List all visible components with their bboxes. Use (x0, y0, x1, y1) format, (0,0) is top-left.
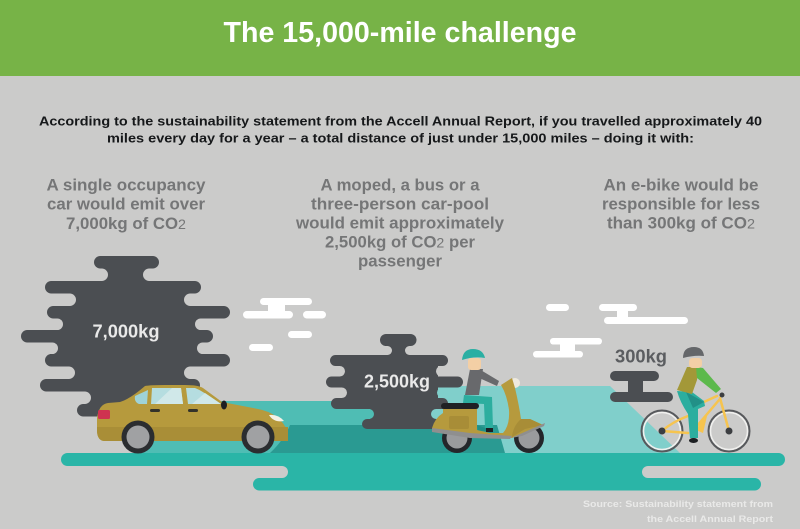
rider torso (677, 367, 698, 394)
column text: moped, bus or car-pool: would emit approximately (295, 214, 505, 232)
intro text: According to the sustainability statement from the Accell Annual Report, if you travelled approximately 40 (39, 114, 762, 128)
column text: moped, bus or car-pool: three-person car-pool (311, 196, 489, 214)
source note (583, 499, 774, 525)
emission cloud: 7,000kg (15, 256, 237, 416)
icon: car (97, 385, 288, 454)
label: 7,000kg: 7,000kg (92, 322, 160, 342)
column text: e-bike: An e-bike would be (604, 176, 758, 194)
column text: single occupancy car: 7,000kg of CO2 (66, 215, 186, 233)
label: 2,500kg: 2,500kg (364, 372, 430, 392)
road and teal trail (61, 386, 792, 490)
emission cloud: 300kg (610, 346, 673, 402)
column text: e-bike: than 300kg of CO 2 (607, 214, 755, 232)
source note: Source: Sustainability statement from (583, 499, 773, 510)
column text: moped, bus or car-pool: A moped, a bus or a (320, 176, 480, 194)
intro text: miles every day for a year – a total distance of just under 15,000 miles – doing it with: (107, 130, 694, 146)
icon: scooter and rider (432, 349, 545, 453)
column text: moped, bus or car-pool: passenger (358, 252, 443, 270)
rider arm (696, 367, 721, 393)
column text: single occupancy car: car would emit over (47, 196, 206, 214)
rider helmet (462, 349, 485, 360)
source note: the Accell Annual Report (647, 514, 774, 525)
column text: single occupancy car: A single occupancy (46, 176, 206, 194)
white clouds, right group (533, 304, 688, 358)
rider legs (463, 395, 493, 428)
white clouds, left group (243, 298, 326, 351)
rider torso and arm (465, 369, 483, 395)
rider legs (677, 391, 705, 438)
title: The 15,000-mile challenge (224, 17, 576, 49)
column text: e-bike (602, 176, 760, 232)
rider helmet (683, 347, 704, 358)
column text: single occupancy car (46, 176, 206, 233)
column text: e-bike: responsible for less (602, 196, 760, 214)
label: 300kg: 300kg (615, 346, 667, 366)
scooter body (432, 378, 543, 438)
column text: moped, bus or car-pool (295, 176, 505, 270)
icon: e-bike and rider (642, 347, 750, 452)
header banner (0, 0, 800, 76)
emission cloud: 2,500kg (320, 334, 466, 429)
intro text (39, 114, 762, 146)
column text: moped, bus or car-pool: 2,500kg of CO2 per (325, 234, 476, 252)
